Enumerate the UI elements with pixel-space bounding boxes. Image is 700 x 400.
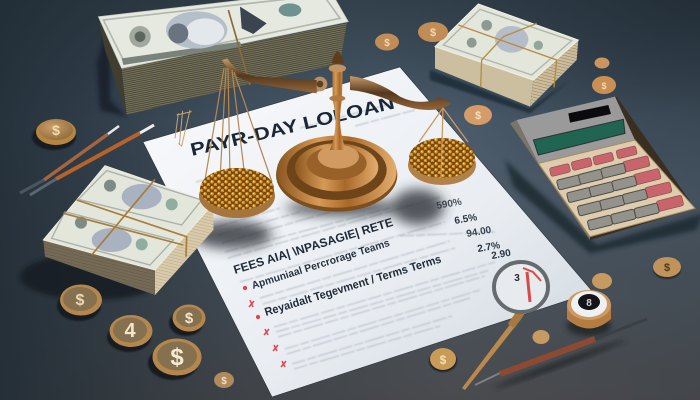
coin: top centre [375,34,399,50]
red keys [549,146,684,212]
coin: number 4: 4 [124,320,136,342]
coin stack with black and white top: 8 [586,298,592,309]
calculator [505,97,700,253]
scale: beam [222,58,452,110]
paperclip [175,110,192,146]
coin: bottom centre: $ [440,353,447,367]
coin: lower left 1: $ [76,292,85,309]
subheading: annual percentage: Apmuniaal Percrorage Teams [250,237,391,292]
coin: top: $ [430,27,436,39]
magnifying glass gauge: 3 [514,273,520,284]
rate figures: 590% [436,197,463,212]
coin: lower left 4 [148,338,202,380]
magnifying glass gauge [462,262,548,390]
coin: bottom centre [429,348,457,372]
coin: small bottom: $ [221,376,227,387]
coin: small right [594,58,610,68]
grey keys [556,163,660,230]
coin: lower left 1 [57,284,102,321]
money stack: top left large [97,0,348,117]
coin: near scale: $ [475,110,481,122]
heading: PAY-DAY LOAN: PAYR-DAY LOLOAN [188,93,396,160]
coin: right [592,76,616,94]
rate figures: 6.5% [454,212,478,227]
coin: top [418,22,448,42]
rate figures: 2.7% [477,240,501,255]
shadow under scale pans [192,189,444,249]
coin: upper left: $ [52,122,60,138]
coin: far right: $ [664,262,670,274]
scale: base [276,52,397,212]
coin: right: $ [601,81,607,91]
subheading: repayment: Reyaidalt Tegevment / Terms Terms [263,254,443,319]
coin: small near pen [532,330,550,344]
coin stack with black and white top [567,290,611,336]
coin: lower left 4: $ [170,344,184,371]
fine print lines [196,100,495,369]
scale: left pan with gold beads [199,68,275,218]
coin: near scale [464,105,492,125]
money stack: left [20,166,213,300]
red check bullets [243,286,286,367]
rate figures [436,197,512,262]
money stack: top right [430,4,578,113]
document sheet: payday loan [143,67,593,397]
coin: lower left 3: $ [185,310,194,327]
rate figures: 2.90 [491,248,512,262]
scale: right pan with gold beads [408,108,476,185]
coin: upper left [32,119,76,150]
rate figures: 94.00 [466,225,493,240]
coin: lower left 3 [169,304,206,336]
pen: lower right [475,319,647,391]
coin: top centre: $ [384,38,390,49]
pen: left upper [20,126,119,193]
pen: left lower [30,125,154,195]
coin: far right [653,257,681,279]
post [330,68,346,150]
coin: number 4 [107,315,152,352]
subheading: fees: FEES AIA| \NPASAGIE| RETE [232,215,395,277]
coin: small bottom [214,372,234,388]
coin: right of paper [592,273,612,289]
